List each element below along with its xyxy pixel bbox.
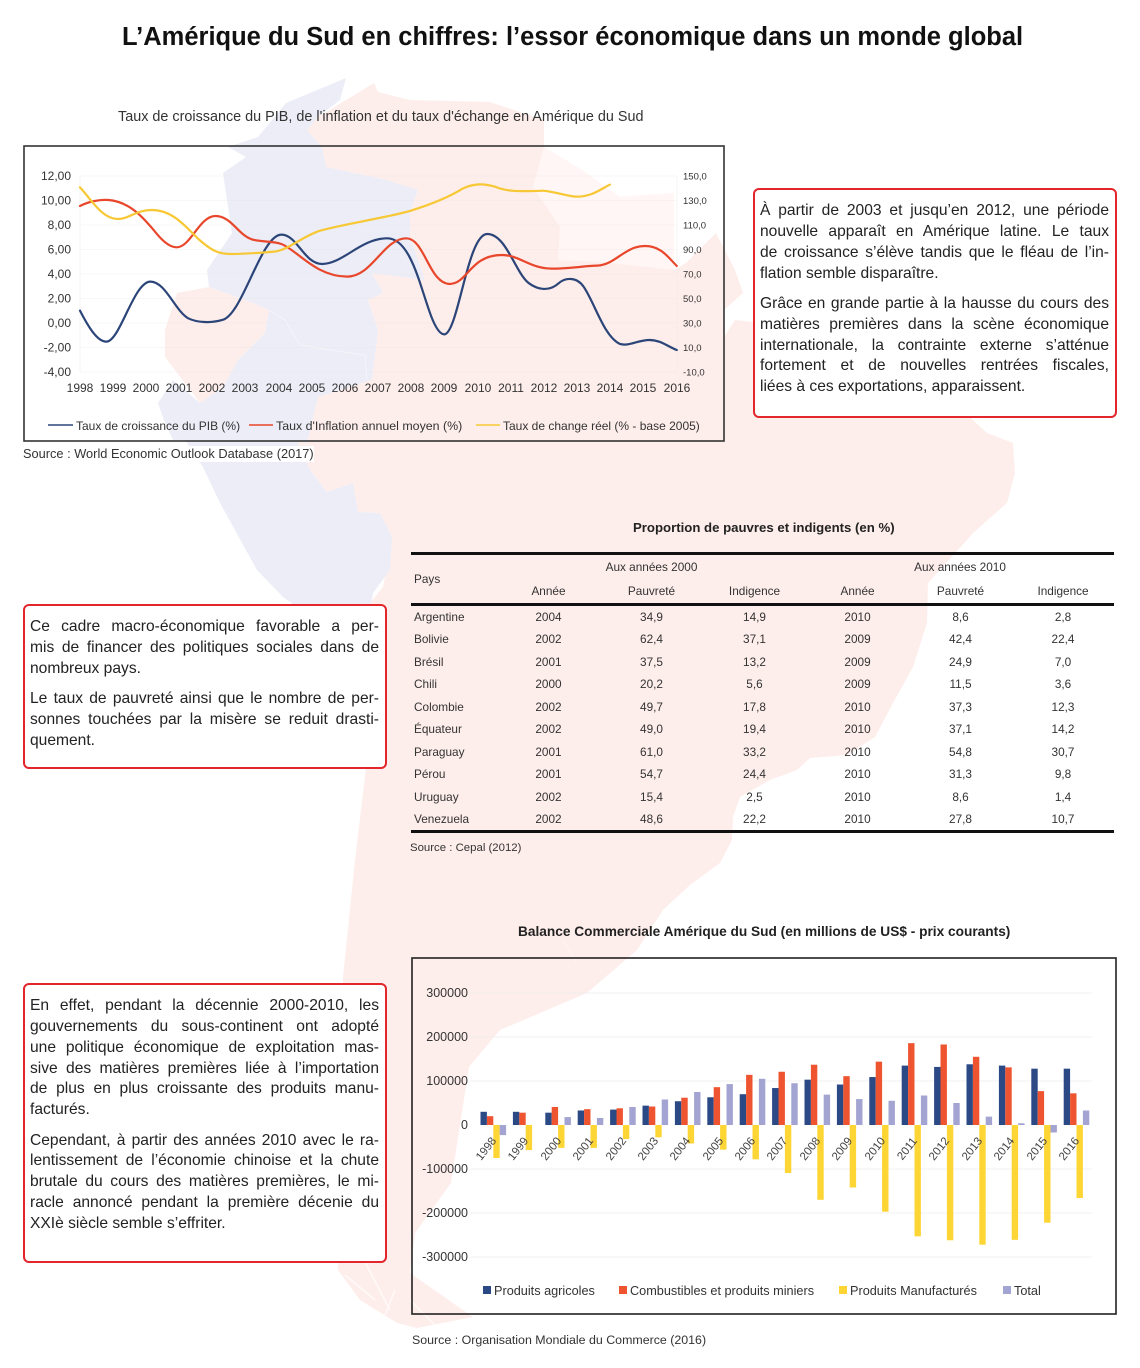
table: poverty and indigence: 8,6 — [952, 790, 969, 804]
year labels: 2007 — [365, 381, 392, 395]
table: poverty and indigence: 2010 — [844, 610, 871, 624]
table: poverty and indigence: 14,9 — [743, 610, 766, 624]
table: poverty and indigence: Brésil — [414, 655, 444, 669]
table: poverty and indigence: 8,6 — [952, 610, 969, 624]
series: produits manufacturés — [493, 1125, 1083, 1245]
table: poverty and indigence: 2001 — [535, 745, 562, 759]
y axis labels — [422, 986, 468, 1264]
text box: 2000-2010 decade: XXIè siècle semble s’effriter. — [30, 1215, 226, 1232]
year labels: 2016 — [664, 381, 691, 395]
table: poverty and indigence: 31,3 — [949, 767, 972, 781]
year labels: 2014 — [597, 381, 624, 395]
table: poverty and indigence: 2002 — [535, 632, 562, 646]
heading: poverty table: Proportion de pauvres et indigents (en %) — [633, 520, 895, 535]
left axis labels: -2,00 — [44, 340, 71, 354]
year labels: 2009 — [431, 381, 458, 395]
text box: 2000-2010 decade: gouvernements du sous-continent ont adopté — [30, 1018, 379, 1035]
table: poverty and indigence: 37,1 — [949, 722, 972, 736]
rotated year labels: 2005 — [701, 1135, 726, 1163]
table: poverty and indigence: 12,3 — [1052, 700, 1074, 714]
rotated year labels: 2001 — [571, 1135, 596, 1163]
year labels: 2012 — [531, 381, 558, 395]
text box: 2003-2012: matières premières dans la scène économique — [760, 316, 1109, 333]
title: L’Amérique du Sud en chiffres: l’essor économique dans un monde global — [122, 23, 1023, 51]
left axis labels: 8,00 — [48, 218, 71, 232]
table: poverty and indigence: 33,2 — [743, 745, 766, 759]
table: poverty and indigence: 2002 — [535, 790, 562, 804]
text box: 2003-2012: de croissance s’élève tandis que le fléau de l’in- — [760, 244, 1109, 261]
left axis labels — [41, 169, 71, 379]
series: produits agricoles — [480, 1064, 1070, 1125]
year labels: 2003 — [232, 381, 259, 395]
text box: macro-economic frame — [23, 604, 387, 769]
text box: macro-economic frame: Le taux de pauvreté ainsi que le nombre de per- — [30, 690, 379, 707]
bar chart: trade balance — [411, 957, 1117, 1315]
table: poverty and indigence: Bolivie — [414, 632, 449, 646]
legend: Taux de croissance du PIB (%) — [76, 419, 240, 433]
year labels: 2015 — [630, 381, 657, 395]
y axis labels: -200000 — [422, 1206, 468, 1220]
text box: 2003-2012: nouvelle apparaît en Amérique latine. Le taux — [760, 223, 1109, 240]
table: poverty and indigence: 2,8 — [1055, 610, 1071, 624]
right axis labels: 110,0 — [683, 220, 706, 232]
table: poverty and indigence: 17,8 — [743, 700, 766, 714]
table: poverty and indigence: 15,4 — [640, 790, 663, 804]
table: poverty and indigence: 14,2 — [1052, 722, 1074, 736]
y axis labels: 200000 — [426, 1030, 468, 1044]
table: poverty and indigence: 2009 — [844, 677, 871, 691]
text box: 2000-2010 decade: racle annoncé pendant la première décenie du — [30, 1194, 379, 1211]
rotated year labels — [474, 1135, 1082, 1163]
year labels: 2002 — [199, 381, 226, 395]
rotated year labels: 2010 — [863, 1135, 888, 1163]
heading: trade balance chart: Balance Commerciale Amérique du Sud (en millions de US$ - prix courants) — [518, 924, 1010, 939]
rotated year labels: 2016 — [1057, 1135, 1082, 1163]
rotated year labels: 1998 — [474, 1135, 499, 1163]
rotated year labels: 2011 — [895, 1136, 920, 1163]
year labels: 2006 — [332, 381, 359, 395]
right axis labels: 150,0 — [683, 172, 707, 182]
table: poverty and indigence: Paraguay — [414, 745, 464, 759]
rotated year labels: 2006 — [733, 1135, 758, 1163]
table: poverty and indigence: 2010 — [844, 812, 871, 826]
table: poverty and indigence: Uruguay — [414, 790, 459, 804]
table: poverty and indigence: 3,6 — [1055, 677, 1071, 691]
table: poverty and indigence: Indigence — [1037, 584, 1089, 598]
legend — [483, 1284, 1041, 1298]
table: poverty and indigence: 5,6 — [746, 677, 763, 691]
heading: line chart: Taux de croissance du PIB, de l'inflation et du taux d'échange en Amérique du Sud — [118, 109, 644, 125]
table: poverty and indigence: 10,7 — [1052, 812, 1074, 826]
text box: macro-economic frame: sonnes touchées par la misère se reduit drasti- — [30, 711, 379, 728]
year labels: 2010 — [465, 381, 492, 395]
line chart: growth, inflation, exchange rate — [23, 145, 725, 442]
table: poverty and indigence: Pérou — [414, 767, 445, 781]
table: poverty and indigence: 2009 — [844, 655, 871, 669]
series: combustibles et produits miniers — [487, 1043, 1076, 1125]
left axis labels: 12,00 — [41, 169, 71, 183]
table: poverty and indigence: 2004 — [535, 610, 562, 624]
rotated year labels: 2009 — [830, 1135, 855, 1163]
text box: 2000-2010 decade: facturés. — [30, 1101, 90, 1118]
table: poverty and indigence: 2002 — [535, 722, 562, 736]
text box: 2003-2012: fortement et de nouvelles rentrées fiscales, — [760, 357, 1109, 374]
text box: 2000-2010 decade: une politique économique de exploitation mas- — [30, 1039, 379, 1056]
y axis labels: 0 — [461, 1118, 468, 1132]
table: poverty and indigence: 61,0 — [640, 745, 663, 759]
table: poverty and indigence: 11,5 — [949, 677, 972, 691]
rotated year labels: 2002 — [604, 1135, 629, 1163]
table: poverty and indigence: 1,4 — [1055, 790, 1071, 804]
legend: Total — [1014, 1284, 1041, 1298]
text box: 2000-2010 decade: sive des matières premières liée à l’importation — [30, 1060, 379, 1077]
text box: macro-economic frame: mis de financer des politiques sociales dans de — [30, 639, 379, 656]
right axis labels: 130,0 — [683, 196, 707, 207]
left axis labels: 6,00 — [48, 242, 71, 256]
table: poverty and indigence: 2010 — [844, 790, 871, 804]
table: poverty and indigence: 34,9 — [640, 610, 663, 624]
table: poverty and indigence: 42,4 — [949, 632, 972, 646]
table: poverty and indigence: 2002 — [535, 700, 562, 714]
table: poverty and indigence: 48,6 — [640, 812, 663, 826]
year labels: 1998 — [67, 381, 94, 395]
table: poverty and indigence: Indigence — [729, 584, 780, 598]
left axis labels: 10,00 — [41, 194, 71, 208]
right axis labels: 50,0 — [683, 294, 702, 305]
text box: 2003-2012: internationale, la contrainte externe s’atténue — [760, 337, 1109, 354]
table: poverty and indigence — [411, 552, 1114, 833]
year labels — [67, 381, 691, 395]
table: poverty and indigence: Année — [840, 584, 875, 598]
year labels: 2001 — [166, 381, 193, 395]
table: poverty and indigence: 27,8 — [949, 812, 972, 826]
legend: Taux de change réel (% - base 2005) — [503, 419, 700, 433]
left axis labels: 0,00 — [48, 316, 71, 330]
table: poverty and indigence: 49,0 — [640, 722, 663, 736]
table: poverty and indigence: 37,1 — [743, 632, 766, 646]
table: poverty and indigence: 2010 — [844, 722, 871, 736]
table: poverty and indigence: 2010 — [844, 745, 871, 759]
left axis labels: 4,00 — [48, 267, 71, 281]
text box: 2003-2012: Grâce en grande partie à la hausse du cours des — [760, 295, 1109, 312]
table: poverty and indigence: 62,4 — [640, 632, 663, 646]
year labels: 1999 — [100, 381, 127, 395]
text box: macro-economic frame: quement. — [30, 732, 95, 749]
left axis labels: -4,00 — [44, 365, 71, 379]
table: poverty and indigence: 54,8 — [949, 745, 972, 759]
legend: Taux d'Inflation annuel moyen (%) — [276, 419, 462, 433]
table: poverty and indigence: 2000 — [535, 677, 562, 691]
text box: 2000-2010 decade — [23, 983, 387, 1263]
legend: Combustibles et produits miniers — [630, 1284, 814, 1298]
rotated year labels: 2007 — [765, 1135, 790, 1163]
right axis labels — [683, 172, 707, 378]
table: poverty and indigence: 37,5 — [640, 655, 663, 669]
right axis labels: 30,0 — [683, 318, 702, 330]
legend — [48, 419, 700, 433]
year labels: 2013 — [564, 381, 591, 395]
source: line chart: Source : World Economic Outlook Database (2017) — [23, 446, 314, 461]
table: poverty and indigence: 7,0 — [1055, 655, 1071, 669]
y axis labels: 100000 — [426, 1074, 468, 1088]
text box: 2000-2010 decade: lentissement de l’économie chinoise et la chute — [30, 1152, 379, 1169]
table: poverty and indigence: 22,2 — [743, 812, 766, 826]
rotated year labels: 2012 — [927, 1135, 952, 1163]
right axis labels: 90,0 — [683, 245, 702, 256]
rotated year labels: 2004 — [668, 1135, 694, 1163]
rotated year labels: 2013 — [960, 1135, 985, 1163]
table: poverty and indigence: 49,7 — [640, 700, 663, 714]
rotated year labels: 2003 — [636, 1135, 661, 1163]
table: poverty and indigence: 9,8 — [1055, 767, 1071, 781]
rotated year labels: 2014 — [992, 1135, 1018, 1163]
right axis labels: 70,0 — [683, 270, 702, 280]
text box: 2000-2010 decade: En effet, pendant la décennie 2000-2010, les — [30, 997, 379, 1014]
data curves — [80, 184, 677, 350]
y axis labels: 300000 — [426, 986, 468, 1000]
table: poverty and indigence: Année — [531, 584, 566, 598]
table: poverty and indigence: Aux années 2010 — [914, 560, 1006, 574]
table: poverty and indigence: 13,2 — [743, 655, 766, 669]
text box: 2003-2012 — [753, 188, 1117, 418]
text box: 2003-2012: flation semble disparaître. — [760, 265, 939, 282]
text box: 2000-2010 decade: brutale du cours des matières premières, le mi- — [30, 1173, 379, 1190]
legend: Produits agricoles — [494, 1284, 595, 1298]
table: poverty and indigence: 2010 — [844, 700, 871, 714]
right axis labels: -10,0 — [683, 368, 705, 378]
rotated year labels: 1999 — [506, 1135, 531, 1163]
left axis labels: 2,00 — [48, 292, 71, 306]
table: poverty and indigence: Équateur — [414, 722, 462, 736]
table: poverty and indigence: Aux années 2000 — [606, 560, 697, 574]
table: poverty and indigence: 19,4 — [743, 722, 766, 736]
year labels: 2008 — [398, 381, 425, 395]
table: poverty and indigence: 22,4 — [1052, 632, 1074, 646]
table: poverty and indigence: Pays — [414, 572, 440, 586]
text box: 2000-2010 decade: de plus en plus croissante des produits manu- — [30, 1080, 379, 1097]
year labels: 2004 — [266, 381, 293, 395]
text box: macro-economic frame: Ce cadre macro-économique favorable a per- — [30, 618, 379, 635]
table: poverty and indigence: 24,4 — [743, 767, 766, 781]
table: poverty and indigence: 2,5 — [746, 790, 763, 804]
legend: Produits Manufacturés — [850, 1284, 977, 1298]
table: poverty and indigence: 2009 — [844, 632, 871, 646]
text box: 2003-2012: liées à ces exportations, apparaissent. — [760, 378, 1025, 395]
table: poverty and indigence: Argentine — [414, 610, 464, 624]
table: poverty and indigence: 37,3 — [949, 700, 972, 714]
table: poverty and indigence: 30,7 — [1052, 745, 1074, 759]
text box: macro-economic frame: nombreux pays. — [30, 660, 141, 677]
table: poverty and indigence: Venezuela — [414, 812, 469, 826]
table: poverty and indigence: Colombie — [414, 700, 464, 714]
y axis labels: -300000 — [422, 1250, 468, 1264]
text box: 2003-2012: À partir de 2003 et jusqu’en 2012, une période — [760, 202, 1109, 219]
table: poverty and indigence: 20,2 — [640, 677, 663, 691]
table: poverty and indigence: 24,9 — [949, 655, 972, 669]
rotated year labels: 2000 — [539, 1135, 564, 1163]
table: poverty and indigence: Pauvreté — [628, 584, 675, 598]
year labels: 2011 — [498, 381, 524, 395]
table: poverty and indigence: Chili — [414, 677, 437, 691]
series: total — [500, 1079, 1089, 1135]
year labels: 2005 — [299, 381, 326, 395]
rotated year labels: 2008 — [798, 1135, 823, 1163]
right axis labels: 10,0 — [683, 343, 702, 354]
rotated year labels: 2015 — [1025, 1135, 1050, 1163]
table: poverty and indigence: 2001 — [535, 767, 562, 781]
source: poverty table: Source : Cepal (2012) — [410, 842, 521, 854]
year labels: 2000 — [133, 381, 160, 395]
table: poverty and indigence: 2002 — [535, 812, 562, 826]
table: poverty and indigence: 54,7 — [640, 767, 663, 781]
y axis labels: -100000 — [422, 1162, 468, 1176]
source: trade balance chart: Source : Organisation Mondiale du Commerce (2016) — [412, 1333, 706, 1347]
text box: 2000-2010 decade: Cependant, à partir des années 2010 avec le ra- — [30, 1132, 379, 1149]
table: poverty and indigence: 2010 — [844, 767, 871, 781]
table: poverty and indigence: Pauvreté — [937, 584, 984, 598]
table: poverty and indigence: 2001 — [535, 655, 562, 669]
